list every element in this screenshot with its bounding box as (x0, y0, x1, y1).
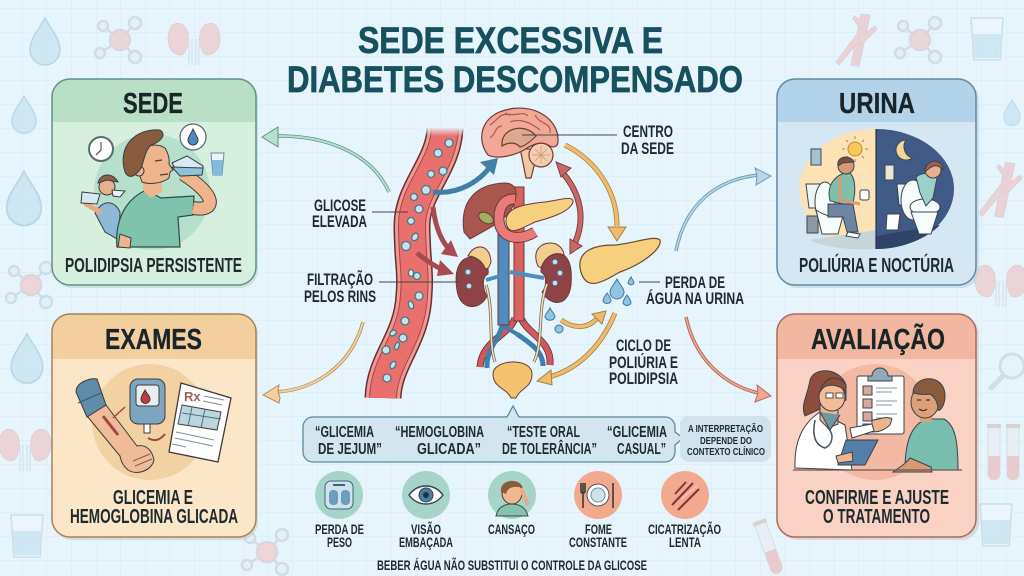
left kidney (456, 257, 488, 307)
test: hemoglobina glicada: “HEMOGLOBINA (395, 424, 484, 441)
gallbladder (477, 210, 495, 226)
icon: fome constante: CONSTANTE (569, 534, 627, 550)
right kidney (541, 254, 571, 302)
caption: confirme e ajuste o tratamento (805, 487, 949, 528)
illustration: day and night toilet visits (799, 129, 954, 249)
glucose in kidneys (465, 259, 563, 289)
caption: confirme e ajuste o tratamento: CONFIRME E AJUSTE (805, 487, 949, 509)
label: ciclo de poliúria e polidipsia: POLIDIPSIA (609, 370, 678, 388)
test: hemoglobina glicada: GLICADA” (417, 441, 481, 458)
label: filtração pelos rins: FILTRAÇÃO (307, 269, 373, 289)
test: glicemia de jejum (315, 424, 382, 458)
heading: urina: URINA (839, 88, 915, 120)
test: hemoglobina glicada (395, 424, 484, 458)
label: filtração pelos rins: PELOS RINS (304, 288, 376, 306)
title: SEDE EXCESSIVA E (358, 19, 663, 61)
test: teste oral de tolerância: DE TOLERÂNCIA” (502, 440, 597, 458)
icon: visão embaçada: VISÃO (411, 520, 441, 537)
caption: polidipsia persistente: POLIDIPSIA PERSISTENTE (65, 255, 242, 277)
illustration: doctor and patient (793, 364, 962, 480)
test: teste oral de tolerância (502, 424, 597, 458)
brain (482, 108, 558, 178)
vena cava (498, 233, 509, 325)
illustration: person drinking water (81, 124, 224, 250)
test: glicemia de jejum: DE JEJUM” (318, 441, 382, 458)
panel: urina (777, 79, 979, 288)
label: glicose elevada (312, 197, 408, 231)
test: teste oral de tolerância: “TESTE ORAL (507, 424, 580, 441)
icon: perda de peso (315, 471, 364, 550)
footer note: BEBER ÁGUA NÃO SUBSTITUI O CONTROLE DA GLICOSE (377, 556, 647, 573)
icon: visão embaçada (399, 471, 453, 550)
upper pancreas (506, 198, 573, 231)
note: clinical context: CONTEXTO CLÍNICO (687, 445, 765, 458)
arrow: to urina panel (676, 168, 771, 251)
label: filtração pelos rins (304, 269, 460, 306)
note: clinical context: A INTERPRETAÇÃO (688, 422, 763, 435)
iliac vessels (480, 318, 550, 368)
blood vessel with glucose (382, 127, 468, 398)
heading: avaliação: AVALIAÇÃO (811, 324, 945, 356)
arrow: to avaliação panel (686, 317, 771, 402)
ureters (486, 284, 547, 362)
caption: glicemia e hemoglobina glicada: HEMOGLOBINA GLICADA (70, 506, 238, 528)
heading: exames: EXAMES (105, 324, 202, 356)
caption: glicemia e hemoglobina glicada (70, 487, 238, 528)
arrow: to sede panel (262, 127, 389, 192)
organs: abdominal anatomy (456, 183, 573, 398)
icon: visão embaçada: EMBAÇADA (399, 534, 453, 550)
label: perda de água na urina: PERDA DE (665, 274, 725, 292)
test: glicemia casual: CASUAL” (617, 441, 666, 458)
icon: fome constante (569, 471, 627, 550)
label: centro da sede: CENTRO (623, 123, 673, 141)
title (287, 19, 743, 100)
illustration: glucose test and lab report (76, 364, 231, 480)
label: glicose elevada: GLICOSE (314, 197, 366, 215)
test: glicemia casual: “GLICEMIA (607, 424, 667, 441)
aorta (514, 187, 524, 321)
panel: sede (52, 79, 258, 288)
label: glicose elevada: ELEVADA (312, 213, 367, 231)
title: DIABETES DESCOMPENSADO (287, 58, 743, 100)
note: clinical context: DEPENDE DO (700, 435, 752, 447)
label: centro da sede (522, 123, 674, 158)
liver (463, 183, 516, 239)
label: ciclo de poliúria e polidipsia: POLIÚRIA E (609, 353, 678, 372)
panel: exames (52, 314, 258, 540)
caption: confirme e ajuste o tratamento: O TRATAMENTO (823, 506, 930, 528)
panel: avaliação (777, 314, 979, 540)
label: perda de água na urina: ÁGUA NA URINA (646, 289, 744, 308)
icon: cicatrização lenta: CICATRIZAÇÃO (648, 520, 721, 537)
icon: cansaço: CANSAÇO (488, 521, 535, 537)
label: ciclo de poliúria e polidipsia (609, 337, 678, 388)
icon: fome constante: FOME (585, 521, 612, 537)
water drops (545, 277, 634, 333)
lower pancreas (580, 238, 660, 283)
renal veins (486, 272, 544, 280)
arrow: to exames panel (263, 322, 363, 403)
caption: poliúria e noctúria: POLIÚRIA E NOCTÚRIA (799, 253, 954, 277)
test: glicemia casual (607, 424, 667, 458)
test: glicemia de jejum: “GLICEMIA (315, 424, 374, 441)
label: ciclo de poliúria e polidipsia: CICLO DE (616, 337, 671, 355)
illustration: glucose test and lab report: Rx (184, 389, 201, 404)
icon: cicatrização lenta (648, 471, 721, 550)
label: centro da sede: DA SEDE (621, 140, 674, 158)
caption: glicemia e hemoglobina glicada: GLICEMIA E (113, 487, 193, 509)
label: perda de água na urina (639, 274, 744, 308)
bladder (493, 362, 532, 398)
arrows: circulation cycle (537, 145, 626, 385)
callout: glucose tests (303, 406, 683, 462)
note: clinical context (680, 416, 771, 462)
duodenum (499, 199, 535, 237)
heading: sede: SEDE (123, 88, 183, 120)
icon: perda de peso: PESO (327, 534, 352, 550)
icon: cansaço (488, 471, 536, 537)
icon: perda de peso: PERDA DE (315, 521, 364, 537)
arrows: glucose to brain and kidneys (417, 158, 498, 276)
icon: cicatrização lenta: LENTA (669, 534, 701, 550)
